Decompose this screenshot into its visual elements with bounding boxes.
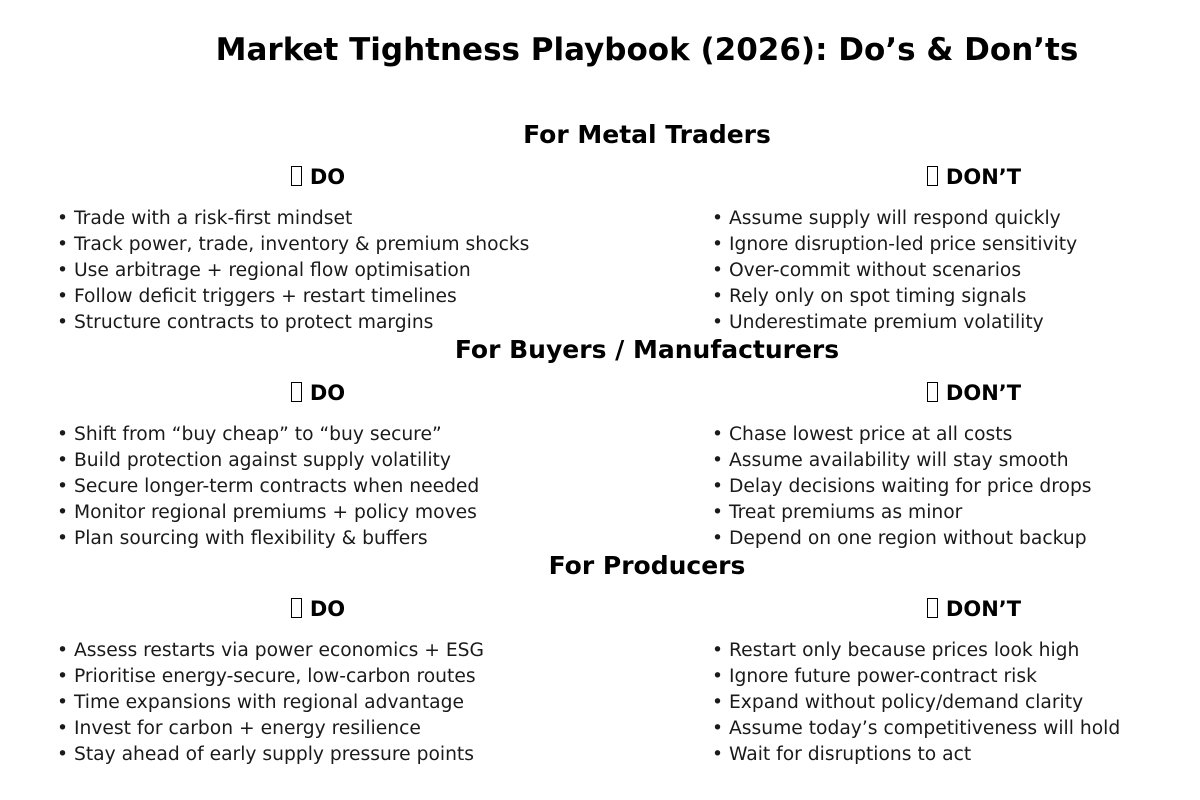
list: do xyxy=(57,640,484,765)
list: don't: • Treat premiums as minor xyxy=(712,502,962,523)
list: do: • Plan sourcing with flexibility & buffers xyxy=(57,528,428,549)
list: do xyxy=(57,424,479,549)
section: producers xyxy=(57,551,1120,765)
heading: buyers: For Buyers / Manufacturers xyxy=(455,335,839,364)
list: don't: • Ignore future power-contract risk xyxy=(712,666,1037,687)
section: buyers xyxy=(57,335,1092,549)
subheading: do xyxy=(291,597,345,621)
list: do: • Invest for carbon + energy resilience xyxy=(57,718,421,739)
list: don't: • Assume today’s competitiveness will hold xyxy=(712,718,1120,739)
list: don't: • Assume availability will stay smooth xyxy=(712,450,1069,471)
list: do: • Build protection against supply volatility xyxy=(57,450,451,471)
heading: producers: For Producers xyxy=(549,551,745,580)
list: do: • Structure contracts to protect margins xyxy=(57,312,433,333)
list: do: • Prioritise energy-secure, low-carbon routes xyxy=(57,666,476,687)
list: don't: • Assume supply will respond quickly xyxy=(712,208,1061,229)
list: do: • Time expansions with regional advantage xyxy=(57,692,464,713)
list: don't: • Ignore disruption-led price sensitivity xyxy=(712,234,1077,255)
list: do: • Shift from “buy cheap” to “buy secure” xyxy=(57,424,442,445)
list: don't: • Restart only because prices look high xyxy=(712,640,1079,661)
list: don't: • Underestimate premium volatility xyxy=(712,312,1044,333)
subheading: do xyxy=(291,165,345,189)
list: do: • Stay ahead of early supply pressure points xyxy=(57,744,474,765)
subheading: do: DO xyxy=(310,597,345,621)
list: do xyxy=(57,208,529,333)
subheading: do: DO xyxy=(310,165,345,189)
subheading: don't: DON’T xyxy=(946,597,1021,621)
subheading: don't: DON’T xyxy=(946,381,1021,405)
list: do: • Track power, trade, inventory & premium shocks xyxy=(57,234,529,255)
list: do: • Use arbitrage + regional flow optimisation xyxy=(57,260,471,281)
list: do: • Secure longer-term contracts when needed xyxy=(57,476,479,497)
list: do: • Assess restarts via power economics + ESG xyxy=(57,640,484,661)
list: don't: • Expand without policy/demand clarity xyxy=(712,692,1083,713)
heading: metal traders: For Metal Traders xyxy=(523,120,771,149)
section: metal traders xyxy=(57,120,1077,333)
title: Market Tightness Playbook (2026): Do’s & Don’ts xyxy=(216,32,1078,68)
list: don't: • Wait for disruptions to act xyxy=(712,744,971,765)
list: do: • Monitor regional premiums + policy moves xyxy=(57,502,477,523)
list: don't: • Chase lowest price at all costs xyxy=(712,424,1012,445)
list: don't: • Rely only on spot timing signals xyxy=(712,286,1026,307)
list: don't: • Delay decisions waiting for price drops xyxy=(712,476,1092,497)
list: do: • Follow deficit triggers + restart timelines xyxy=(57,286,457,307)
list: don't xyxy=(712,424,1092,549)
list: don't xyxy=(712,208,1077,333)
list: don't xyxy=(712,640,1120,765)
subheading: don't: DON’T xyxy=(946,165,1021,189)
list: don't: • Depend on one region without backup xyxy=(712,528,1087,549)
subheading: do xyxy=(291,381,345,405)
list: don't: • Over-commit without scenarios xyxy=(712,260,1021,281)
subheading: do: DO xyxy=(310,381,345,405)
list: do: • Trade with a risk-first mindset xyxy=(57,208,352,229)
